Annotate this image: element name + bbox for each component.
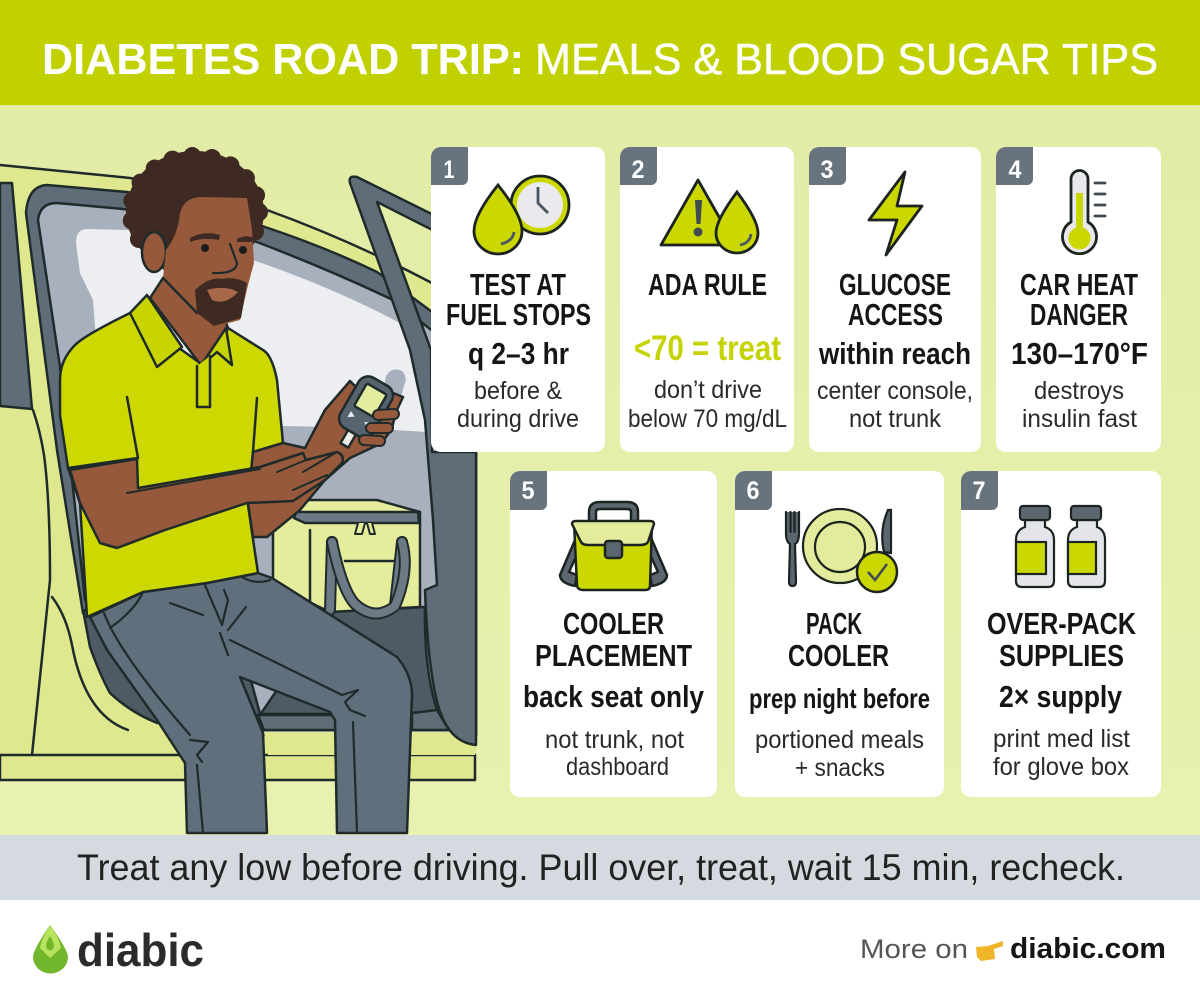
car body and window <box>0 165 476 780</box>
right arm and hand holding glucose meter <box>248 372 403 537</box>
footer link: diabic.com <box>1010 933 1166 965</box>
card 2: ADA rule <box>620 147 794 452</box>
bottom advice banner <box>0 835 1200 900</box>
face details <box>190 233 253 326</box>
card 3: glucose access: not trunk <box>849 405 941 433</box>
card 6: pack cooler <box>735 471 944 797</box>
card 1: test at fuel stops: TEST AT <box>470 267 566 302</box>
shirt collar and placket <box>130 295 232 407</box>
cooler bag on seat <box>273 500 420 614</box>
card 1: test at fuel stops: 1 <box>444 156 455 184</box>
card 7: over-pack supplies: for glove box <box>993 753 1129 781</box>
card 1: test at fuel stops: during drive <box>457 405 579 433</box>
polo shirt <box>60 313 283 617</box>
card 6: pack cooler: PACK <box>806 606 862 641</box>
card 4: car heat danger <box>996 147 1161 452</box>
title banner: MEALS & BLOOD SUGAR TIPS <box>535 35 1158 84</box>
card 1: test at fuel stops <box>431 147 605 452</box>
card 1: test at fuel stops: FUEL STOPS <box>446 297 591 332</box>
card 7: over-pack supplies: print med list <box>993 725 1130 753</box>
card 7: over-pack supplies: OVER-PACK <box>987 606 1136 641</box>
footer link <box>860 933 1166 965</box>
illustration: man testing blood sugar in car <box>0 151 476 833</box>
card 2: ADA rule: 2 <box>632 156 644 184</box>
glucose meter <box>328 372 397 455</box>
card 5: cooler placement: not trunk, not <box>545 726 684 754</box>
icon: cooler bag <box>560 502 667 590</box>
card 2: ADA rule: ADA RULE <box>648 267 767 302</box>
card 5: cooler placement: 5 <box>522 477 535 505</box>
card 2: ADA rule: don’t drive <box>654 376 762 404</box>
card 3: glucose access: center console, <box>817 377 973 405</box>
card 6: pack cooler: COOLER <box>788 638 889 673</box>
card 2: ADA rule: below 70 mg/dL <box>628 405 787 433</box>
card 3: glucose access: within reach <box>818 336 971 371</box>
card 7: over-pack supplies: SUPPLIES <box>999 638 1124 673</box>
footer link: More on <box>860 934 968 964</box>
card 7: over-pack supplies: 2× supply <box>999 679 1123 714</box>
icon: warning triangle and drop <box>661 180 758 253</box>
bottom advice banner: Treat any low before driving. Pull over, treat, wait 15 min, recheck. <box>77 847 1125 888</box>
icon: thermometer <box>1062 171 1105 254</box>
card 5: cooler placement <box>510 471 717 797</box>
icon: lightning bolt <box>869 172 922 255</box>
card 4: car heat danger: 4 <box>1008 156 1022 184</box>
card 3: glucose access <box>809 147 981 452</box>
card 2: ADA rule: <70 = treat <box>634 329 781 368</box>
card 3: glucose access: ACCESS <box>848 297 943 332</box>
title banner: DIABETES ROAD TRIP: <box>42 35 524 84</box>
card 5: cooler placement: dashboard <box>566 753 669 781</box>
icon: drop and clock <box>474 176 569 254</box>
left arm and open palm <box>70 452 343 548</box>
card 5: cooler placement: PLACEMENT <box>535 638 692 673</box>
card 3: glucose access: GLUCOSE <box>839 267 951 302</box>
card 6: pack cooler: portioned meals <box>755 726 924 754</box>
card 4: car heat danger: insulin fast <box>1022 405 1137 433</box>
card 6: pack cooler: + snacks <box>795 754 885 782</box>
icon: pointing hand <box>976 941 1003 961</box>
card 6: pack cooler: 6 <box>746 477 760 505</box>
trousers <box>90 573 412 833</box>
card 7: over-pack supplies <box>961 471 1161 797</box>
card 4: car heat danger: 130–170°F <box>1011 336 1148 371</box>
icon: supply vials <box>1016 506 1105 587</box>
card 1: test at fuel stops: q 2–3 hr <box>468 336 569 371</box>
card 4: car heat danger: destroys <box>1034 377 1124 405</box>
card 4: car heat danger: CAR HEAT <box>1020 267 1138 302</box>
icon: fork, plate, knife, check <box>786 509 897 592</box>
seat <box>83 607 449 730</box>
logo: diabic: diabic <box>77 924 204 976</box>
open door frame <box>350 177 476 745</box>
card 5: cooler placement: back seat only <box>523 679 705 714</box>
card 6: pack cooler: prep night before <box>749 683 930 714</box>
title banner <box>0 0 1200 105</box>
card 5: cooler placement: COOLER <box>563 606 664 641</box>
card 1: test at fuel stops: before & <box>474 377 562 405</box>
card 7: over-pack supplies: 7 <box>972 477 986 505</box>
card 3: glucose access: 3 <box>820 156 834 184</box>
card 4: car heat danger: DANGER <box>1030 297 1128 332</box>
head and neck <box>126 151 264 364</box>
